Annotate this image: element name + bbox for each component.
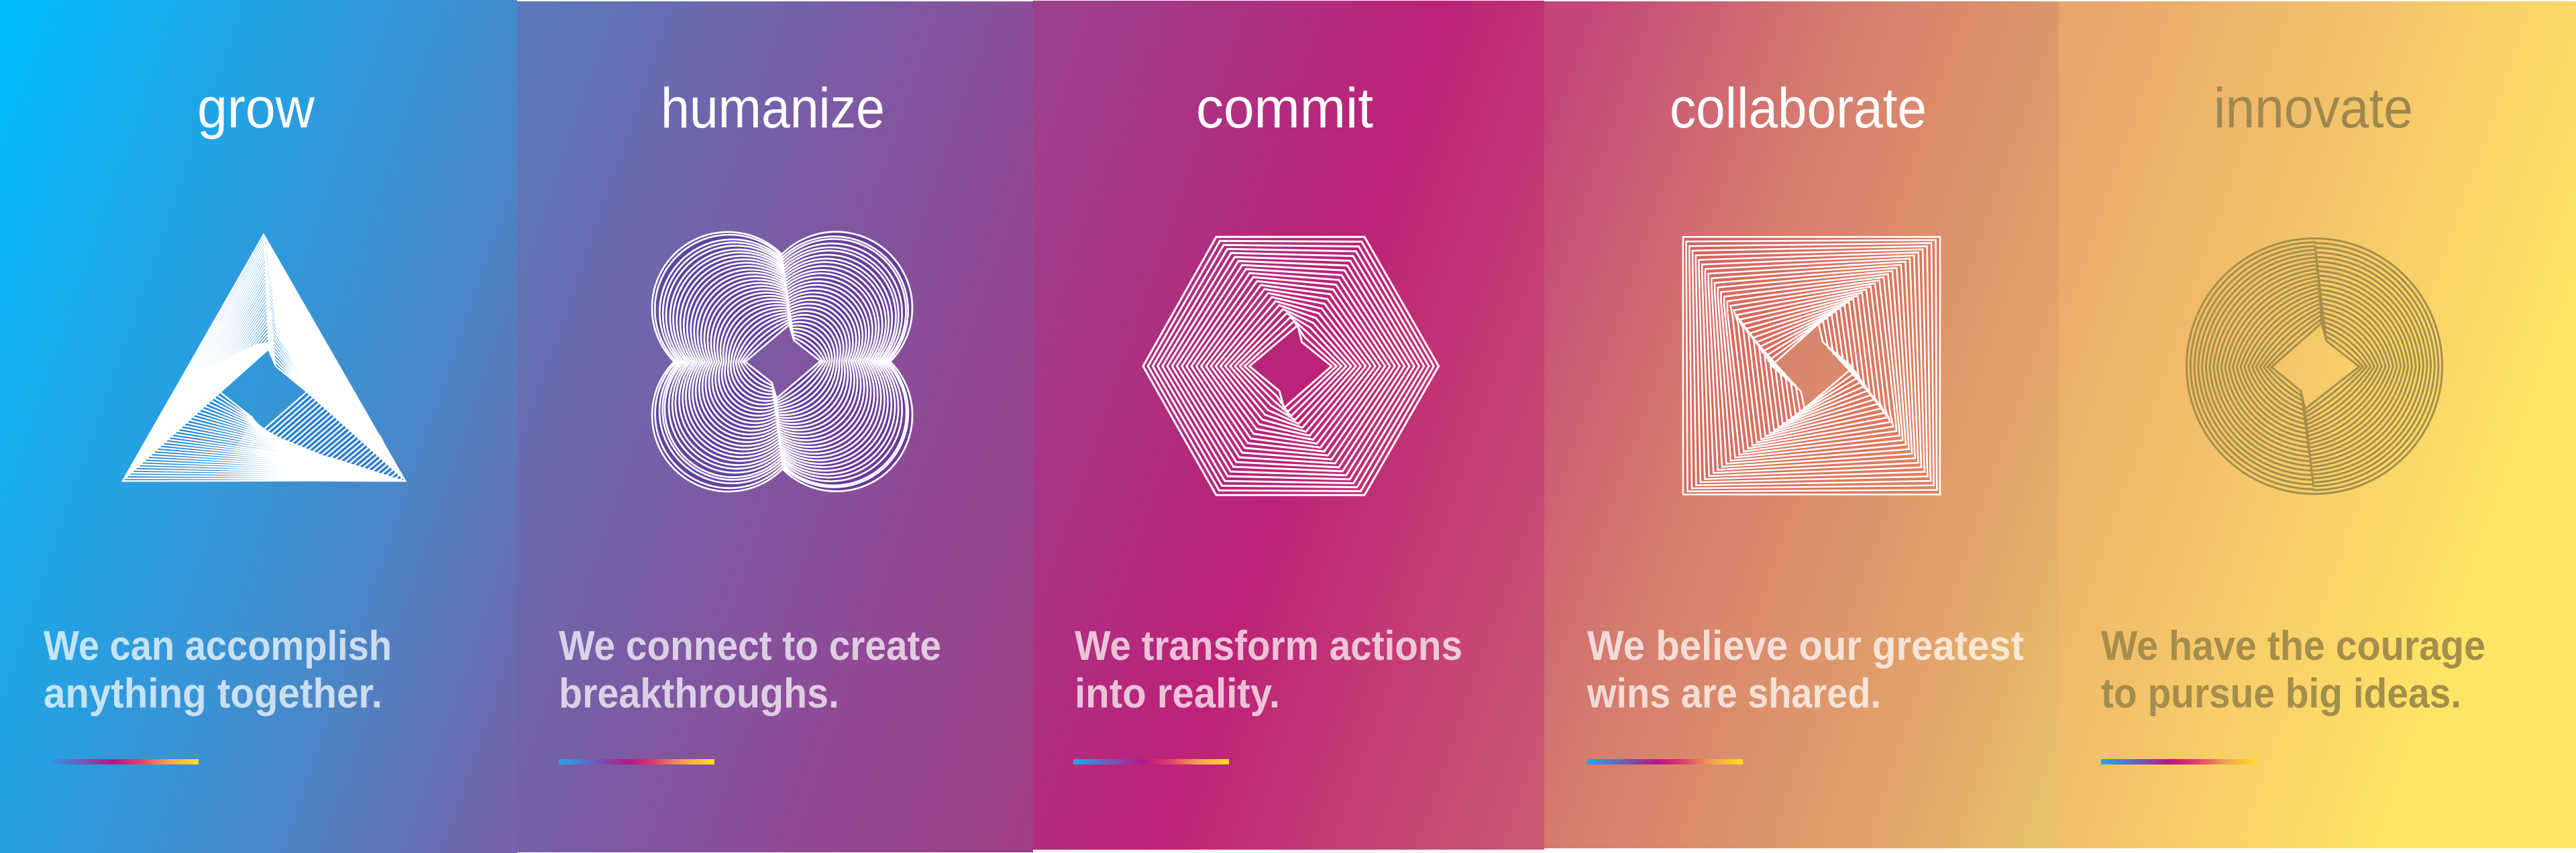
body text: collaborate [1587, 623, 2024, 717]
icon: four lobes line spiral [652, 232, 912, 492]
gradient bar: commit [1073, 759, 1229, 764]
heading: commit: commit [1196, 76, 1373, 139]
body text: collaborate: We believe our greatest [1587, 623, 2024, 669]
panel: commit [1033, 1, 1544, 850]
panel background: collaborate [1544, 1, 2059, 848]
body text: commit: We transform actions [1075, 623, 1462, 669]
body text: humanize: breakthroughs. [559, 671, 839, 717]
gradient bar: collaborate [1587, 759, 1743, 764]
gradient bar: grow [44, 759, 199, 764]
heading: humanize: humanize [661, 76, 885, 139]
heading: collaborate: collaborate [1670, 76, 1927, 139]
body text: grow: We can accomplish [44, 623, 392, 669]
panel background: innovate [2059, 1, 2576, 848]
panel: humanize [517, 1, 1033, 852]
body text: humanize [559, 623, 941, 717]
body text: grow: anything together. [44, 671, 382, 717]
body text: commit: into reality. [1075, 671, 1280, 717]
icon: square line spiral [1683, 237, 1940, 494]
body text: collaborate: wins are shared. [1587, 671, 1881, 717]
body text: innovate: to pursue big ideas. [2101, 671, 2461, 717]
icon: hexagon line spiral [1143, 237, 1438, 495]
icon: circle line spiral [2187, 239, 2442, 494]
heading: grow: grow [197, 76, 315, 139]
panel background: commit [1033, 1, 1544, 850]
panel: collaborate [1544, 1, 2059, 848]
heading: innovate: innovate [2214, 76, 2413, 139]
body text: grow [44, 623, 392, 717]
panel: grow [0, 0, 517, 853]
gradient bar: humanize [559, 759, 714, 764]
body text: innovate [2101, 623, 2485, 717]
body text: innovate: We have the courage [2101, 623, 2485, 669]
panel: innovate [2059, 1, 2576, 848]
body text: commit [1075, 623, 1462, 717]
gradient bar: innovate [2101, 759, 2257, 764]
panel background: humanize [517, 1, 1033, 852]
icon: triangle line spiral [123, 235, 405, 481]
panel background: grow [0, 0, 517, 853]
body text: humanize: We connect to create [559, 623, 941, 669]
